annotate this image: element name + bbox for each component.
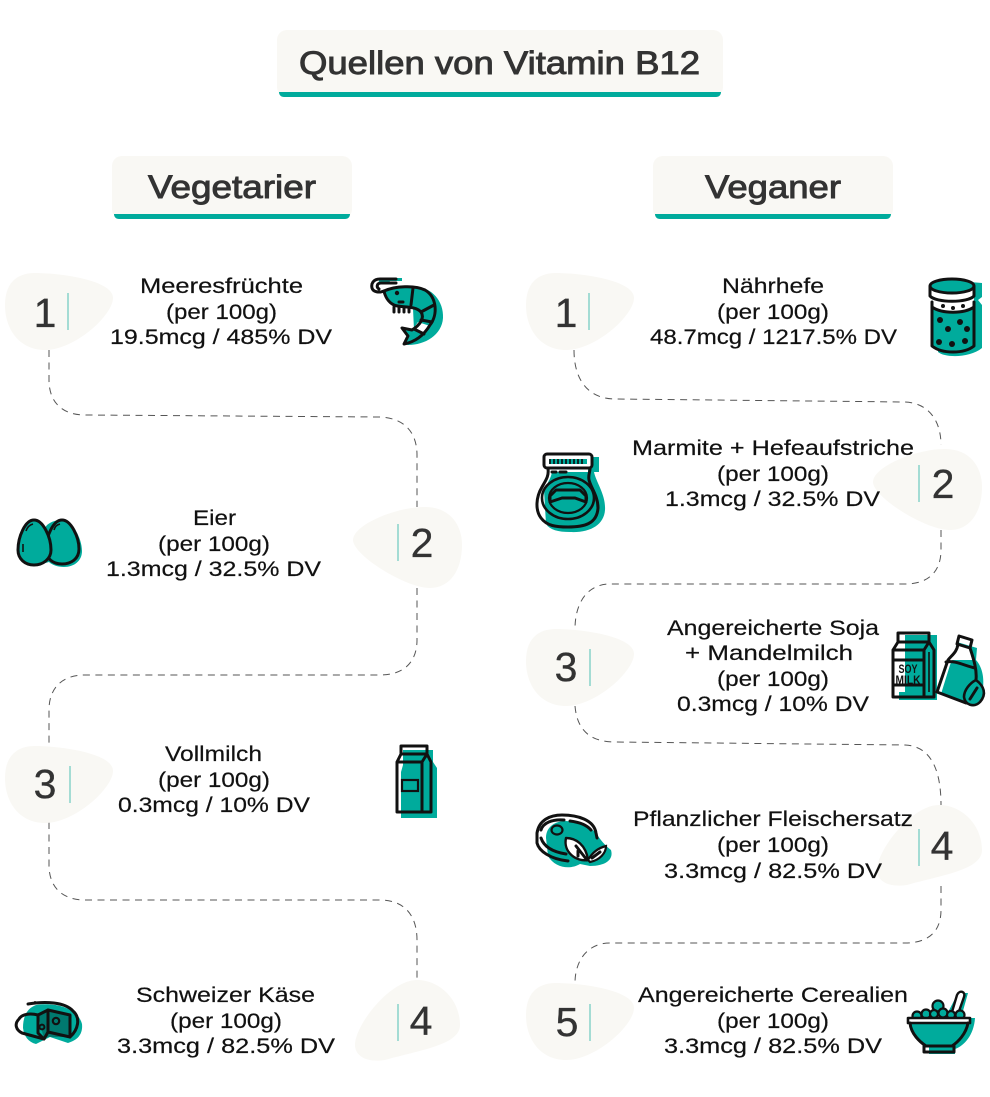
heading: Vegetarier	[112, 156, 352, 219]
icon: eggs	[18, 520, 82, 567]
text: Angereicherte Cerealien: (per 100g)	[717, 1009, 829, 1033]
text: Pflanzlicher Fleischersatz: (per 100g)	[717, 833, 829, 857]
number badge 4: 4	[410, 998, 432, 1044]
number badge 3	[5, 746, 113, 823]
number badge 3	[526, 629, 634, 706]
number badge 2: 2	[932, 461, 954, 507]
text: Soja und Mandelmilch: 0.3mcg / 10% DV	[677, 692, 870, 716]
text: Pflanzlicher Fleischersatz: 3.3mcg / 82.5% DV	[664, 859, 883, 883]
heading: Veganer: Veganer	[705, 169, 841, 205]
icon: cheese	[16, 1001, 82, 1044]
text: Nährhefe: (per 100g)	[717, 300, 829, 324]
number badge 3: 3	[34, 761, 56, 807]
number badge 5: 5	[556, 999, 578, 1045]
icon: milk carton	[397, 746, 437, 818]
text: Meeresfrüchte: 19.5mcg / 485% DV	[110, 325, 333, 349]
number badge 1	[526, 273, 634, 350]
number badge 2	[353, 507, 462, 588]
icon: shrimp	[372, 278, 443, 345]
number badge 1	[5, 273, 113, 350]
text: Soja und Mandelmilch: Angereicherte Soja	[667, 616, 879, 640]
panel: vegan item 5 Angereicherte Cerealien	[526, 983, 975, 1060]
panel: vegan item 3 Soja und Mandelmilch	[526, 616, 984, 716]
panel: vegetarian item 3 Vollmilch	[5, 742, 437, 823]
number badge 3: 3	[555, 644, 577, 690]
icon: soy milk carton and bottle	[893, 633, 984, 705]
text: Marmite: Marmite + Hefeaufstriche	[632, 436, 914, 460]
text: Vollmilch: (per 100g)	[158, 768, 270, 792]
number badge 4: 4	[931, 823, 953, 869]
icon: soy milk carton and bottle: MILK	[896, 675, 921, 687]
icon: cereal bowl	[908, 992, 975, 1054]
panel: vegetarian item 1 Meeresfrüchte	[5, 273, 443, 350]
text: Angereicherte Cerealien: Angereicherte Cerealien	[638, 983, 908, 1007]
text: Schweizer Käse: 3.3mcg / 82.5% DV	[117, 1034, 336, 1058]
text: Marmite: (per 100g)	[717, 462, 829, 486]
text: Soja und Mandelmilch: (per 100g)	[717, 667, 829, 691]
connector: vegan path	[574, 350, 941, 983]
text: Pflanzlicher Fleischersatz: Pflanzlicher Fleischersatz	[633, 807, 913, 831]
text: Vollmilch	[118, 742, 311, 817]
connector: vegetarian path	[49, 350, 417, 980]
title	[277, 30, 723, 97]
text: Angereicherte Cerealien	[638, 983, 908, 1058]
text: Soja und Mandelmilch: + Mandelmilch	[685, 641, 853, 665]
number badge 2	[873, 449, 982, 530]
text: Schweizer Käse	[117, 983, 336, 1058]
number badge 2: 2	[411, 520, 433, 566]
text: Soja und Mandelmilch	[667, 616, 879, 716]
text: Vollmilch: Vollmilch	[165, 742, 262, 766]
panel: vegetarian item 4 Schweizer Käse	[16, 980, 460, 1061]
panel: vegan item 2 Marmite	[537, 436, 982, 532]
number badge 1: 1	[34, 290, 56, 336]
number badge 5	[526, 983, 634, 1060]
text: Schweizer Käse: (per 100g)	[170, 1009, 282, 1033]
text: Angereicherte Cerealien: 3.3mcg / 82.5% DV	[664, 1034, 883, 1058]
panel: vegetarian item 2 Eier	[18, 506, 462, 588]
text: Eier: Eier	[193, 506, 236, 530]
text: Marmite	[632, 436, 914, 511]
number badge 1: 1	[555, 290, 577, 336]
text: Nährhefe: Nährhefe	[722, 274, 824, 298]
text: Vollmilch: 0.3mcg / 10% DV	[118, 793, 311, 817]
text: Eier: 1.3mcg / 32.5% DV	[106, 557, 322, 581]
text: Eier: (per 100g)	[158, 532, 270, 556]
heading: Veganer	[653, 156, 893, 219]
text: Pflanzlicher Fleischersatz	[633, 807, 913, 883]
text: Eier	[106, 506, 322, 581]
panel: vegan item 4 Pflanzlicher Fleischersatz	[537, 805, 982, 886]
panel: vegan item 1 Nährhefe	[526, 273, 982, 356]
title: Quellen von Vitamin B12	[299, 45, 700, 81]
icon: marmite jar	[537, 454, 605, 532]
text: Meeresfrüchte: (per 100g)	[166, 300, 277, 324]
number badge 4	[355, 980, 460, 1061]
text: Nährhefe	[650, 274, 898, 349]
icon: yeast jar	[930, 279, 982, 356]
text: Schweizer Käse: Schweizer Käse	[136, 983, 315, 1007]
text: Meeresfrüchte	[110, 274, 333, 349]
text: Marmite: 1.3mcg / 32.5% DV	[665, 487, 881, 511]
text: Meeresfrüchte: Meeresfrüchte	[140, 274, 303, 298]
icon: plant-based meat	[537, 815, 612, 867]
heading: Vegetarier: Vegetarier	[148, 169, 316, 205]
icon: soy milk carton and bottle: SOY	[898, 664, 918, 676]
text: Nährhefe: 48.7mcg / 1217.5% DV	[650, 325, 898, 349]
number badge 4	[877, 805, 982, 886]
